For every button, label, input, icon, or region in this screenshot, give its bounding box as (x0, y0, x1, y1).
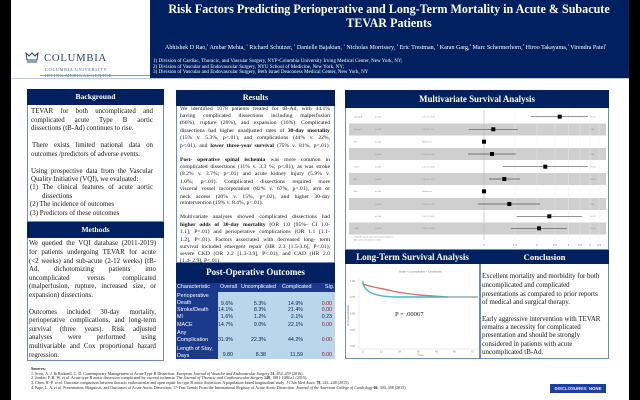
heading: conclusion: Conclusion (523, 252, 566, 262)
text: methods paragraphs: for patients undergoing TEVAR for acute (29, 249, 156, 256)
row: perioperative death (177, 293, 332, 307)
text: methods paragraphs: Outcomes included 30-day mortality, (29, 309, 156, 316)
chart: forest plot: Overall hazard ratio and model statistics (354, 236, 394, 238)
text: conclusion paragraphs: considered in patients with acute (482, 341, 572, 348)
row: MACE: MACE (177, 322, 193, 328)
references (31, 366, 407, 390)
text: background paragraphs: outcomes /predictors of adverse events. (31, 151, 140, 158)
heading: background (27, 89, 164, 105)
chart: forest plot: 1.2 (0.8–1.6) (422, 154, 435, 156)
chart: forest plot: Ref (354, 191, 358, 193)
row: MACE: 22.1% (288, 322, 303, 328)
text: results paragraphs: reintervention (19% v. 8.4%, p<.01). (180, 200, 263, 206)
chart: forest plot: n=100 (375, 216, 382, 218)
title: Risk Factors Predicting Perioperative and Long-Term Mortality in Acute & Subacute (168, 2, 610, 16)
panel: post-operative outcomes table (176, 263, 335, 359)
chart: forest plot: 1.4 (1.1–1.7) (422, 179, 435, 181)
chart: forest plot: CAD (354, 227, 359, 230)
text: conclusion paragraphs: presentation and should be strongly (482, 332, 580, 339)
text: methods paragraphs: (<2 weeks) and sub-acute (2-12 weeks) (tB- (29, 258, 156, 265)
row: MI: 0.23 (322, 314, 332, 320)
text: results paragraphs: [1.4- 2.9], P<.01). (180, 258, 221, 264)
row: MACE: 9.0% (254, 322, 266, 328)
text: conclusion paragraphs: Excellent mortality and morbidity for both (482, 273, 599, 280)
row: stroke/death: 14.1% (218, 307, 233, 313)
chart: forest plot: Reference (422, 190, 433, 193)
panel: methods (27, 222, 164, 361)
chart: Kaplan-Meier survival curves: 0.25 (350, 329, 355, 332)
text: results paragraphs: visceral vessel incorporation (82% v. 67%, p<.01), arm or (180, 186, 330, 192)
text: background paragraphs: There exists limited national data on (32, 142, 153, 149)
chart: forest plot: 1.5 (513, 243, 517, 247)
table header row: Sig. (325, 284, 334, 290)
row: perioperative death: 5.3% (254, 301, 266, 307)
text: background paragraphs: TEVAR for both uncomplicated and (31, 108, 153, 115)
row: length of stay: 9.80 (223, 352, 233, 358)
row: stroke/death: 0.00 (322, 307, 332, 313)
text: results paragraphs: survival included emergent repair (HR 2.3 [1.5-3.6], P<.01), (180, 244, 330, 250)
heading: multivariate survival analysis: Multivariate Survival Analysis (419, 94, 535, 104)
chart: Kaplan-Meier survival curves: 12 (380, 350, 383, 354)
chart: forest plot: <0.01 (590, 116, 596, 118)
row: perioperative death: Perioperative (177, 293, 209, 299)
chart: forest plot: 0.08 (590, 204, 595, 206)
chart: forest plot: 2.3 (1.5–3.6) (422, 216, 435, 218)
disclosures badge: DISCLOSURES: NONE (554, 386, 602, 391)
text: methods paragraphs: perioperative complications, and long-term (29, 317, 156, 324)
heading: background: Background (76, 92, 115, 101)
panel: results (176, 90, 335, 263)
chart: Kaplan-Meier survival curves: 0.00 (350, 345, 355, 348)
text: methods paragraphs: (malperfusion, rupture, increased size, or (29, 283, 156, 290)
chart: forest plot: n=100 (375, 191, 382, 193)
chart: forest plot: Group A (354, 116, 363, 118)
chart: Kaplan-Meier survival curves: 0.75 (350, 296, 355, 299)
text: background paragraphs: Using prospective data from the Vascular (31, 168, 153, 175)
text: background paragraphs (30, 108, 153, 217)
text: conclusion paragraphs: uncomplicated tB-Ad. (482, 349, 543, 356)
heading: post-operative outcomes: Post-Operative Outcomes (206, 267, 305, 277)
panel: conclusion (480, 250, 609, 359)
references: 2. Jonker, F. H. W. et al. Acute type B aortic dissection complicated by visceral ischemia. The Journal of Thoracic and Cardiovascular Surgery 149, 1081-1086.e1 (2015). (31, 375, 307, 380)
table first column background (176, 283, 218, 359)
row: length of stay: 0.00 (322, 352, 332, 358)
chart: forest plot: 2 (536, 243, 538, 247)
chart: forest plot: 2.7 (1.6–3.7) (422, 116, 435, 118)
chart: forest plot: n=100 (375, 116, 382, 118)
chart: forest plot: 2.0 (1.4–2.9) (422, 228, 435, 230)
chart: forest plot: n=100 (375, 204, 382, 206)
text: results paragraphs: complicated dissections (11% v. 3.3 %; p<.01), as was stroke (180, 164, 330, 170)
logo subtitle: COLUMBIA UNIVERSITY (45, 67, 107, 72)
chart: forest plot: 1 (483, 243, 485, 247)
chart: forest plot (349, 110, 606, 247)
chart: forest plot: n=100 (375, 154, 382, 156)
chart: Kaplan-Meier survival curves: Survival probability (347, 304, 350, 326)
text: conclusion paragraphs (482, 272, 600, 356)
text: conclusion paragraphs: uncomplicated and complicated (482, 282, 570, 289)
chart: forest plot: CKD (354, 166, 359, 168)
chart: forest plot: <0.01 (590, 227, 596, 230)
row: any complication: 22.3% (251, 337, 266, 343)
chart: Kaplan-Meier survival curves: 48 (435, 350, 438, 354)
chart: forest plot: n=100 (375, 142, 382, 144)
chart: forest plot: n=100 (375, 179, 382, 181)
text: methods paragraphs: uncomplicated versus complicated (29, 275, 156, 282)
chart: Kaplan-Meier survival curves: P = .00067 (395, 311, 424, 318)
heading: methods (27, 222, 164, 238)
chart: forest plot: 0.09 (590, 154, 595, 156)
text: methods paragraphs: survival (three years). Risk adjusted (29, 326, 156, 333)
chart: Kaplan-Meier survival curves: Strata + Uncomplicated + Complicated (399, 270, 442, 274)
chart: forest plot: n=100 (375, 129, 382, 131)
references: Sources: (31, 366, 46, 371)
logo wordmark: COLUMBIA (44, 52, 107, 64)
row: MACE (177, 322, 332, 328)
text: results paragraphs: Post- operative spinal ischemia was more common in (180, 157, 330, 163)
row: any complication: Any (177, 330, 186, 336)
text: results paragraphs: (66%), rupture (20%), and expansion (16%). Complicated (180, 120, 330, 126)
table header row: Complicated (282, 284, 311, 290)
text: results paragraphs: 1.1], P=.01) and perioperative complications (OR 1.1 [1.1- (180, 229, 330, 235)
text: results paragraphs: (8.2% v. 3.7%; p<.01) and acute kidney injury (5.9% v. (180, 171, 330, 177)
chart: forest plot: 1.5 (0.9–2.1) (422, 204, 435, 206)
text: results paragraphs: p<.01), and lower three-year survival (75% v. 81%, p<.01). (180, 143, 330, 149)
row: length of stay: Days (177, 352, 189, 358)
references: 4. Pape, L. A. et al. Presentation, Diagnosis, and Outcomes of Acute Aortic Dissection: 17-Year Trends From the International Registry of Acute Aortic Dissection. Journal of the American College of Cardiology 66, 350–358 (2015). (31, 385, 407, 390)
heading: long-term survival analysis (345, 250, 480, 264)
row: length of stay: 8.38 (256, 352, 266, 358)
chart: Kaplan-Meier survival curves: 72 (471, 350, 474, 354)
row: stroke/death: 8.3% (254, 307, 266, 313)
text: conclusion paragraphs: of medical and surgical therapy. (482, 299, 570, 306)
heading: results: Results (243, 93, 268, 102)
row: MI: 2.1% (291, 314, 303, 320)
text: background paragraphs: dissections (42, 193, 72, 200)
text: background paragraphs: (2) The incidence of outcomes (30, 201, 114, 208)
row: stroke/death: 21.4% (288, 307, 303, 313)
chart: forest plot: 2.2 (1.3–3.9) (422, 166, 435, 168)
text: conclusion paragraphs: Early aggressive intervention with TEVAR (482, 316, 600, 323)
chart: forest plot: n=100 (375, 228, 382, 230)
row: perioperative death: 14.9% (288, 301, 303, 307)
heading: post-operative outcomes (176, 263, 335, 283)
text: methods paragraphs: analyses were performed using (29, 334, 156, 341)
row: any complication: 0.00 (322, 337, 332, 343)
chart: forest plot: 2.5 (553, 243, 557, 247)
row: length of stay: Length of Stay, (177, 346, 213, 352)
row: length of stay: 11.59 (290, 352, 303, 358)
logo subtitle line 2: IRVING MEDICAL CENTER (45, 72, 112, 78)
chart: forest plot: Reference (422, 140, 433, 144)
panel: long-term survival analysis (345, 250, 480, 359)
row: MI: MI (177, 314, 183, 320)
chart: Kaplan-Meier survival curves: 24 (398, 350, 401, 354)
row: any complication: 44.2% (288, 337, 303, 343)
row: MACE: 0.00 (322, 322, 332, 328)
chart: Kaplan-Meier survival curves: 36 (416, 350, 420, 354)
affiliations: 1) Division of Cardiac, Thoracic, and Vascular Surgery, NYP-Columbia University Irving Medical Center, New York, NY; (153, 58, 403, 64)
heading: methods: Methods (81, 225, 110, 234)
chart: forest plot: <0.01 (590, 215, 596, 218)
text: results paragraphs: neck access (20% v. 15%, p=.02), and higher 30-day (180, 194, 330, 200)
chart: forest plot: 4.5 (597, 243, 601, 247)
text: methods paragraphs: expansion) dissections. (29, 292, 93, 299)
text: results paragraphs: We identified 1078 patients treated for tB-Ad, with 44.1% (180, 106, 330, 112)
row: MI (177, 314, 332, 320)
row: length of stay (177, 346, 332, 358)
affiliations: 2) Division of Vascular and Endovascular Surgery, NYU School of Medicine, New York, NY; (153, 64, 344, 70)
affiliations (153, 58, 403, 75)
disclosures badge (550, 384, 606, 393)
chart: forest plot: 3 (568, 243, 570, 247)
chart: Kaplan-Meier survival curves (347, 270, 479, 357)
text: background paragraphs: Quality Initiative (VQI), we evaluated: (31, 176, 138, 183)
text: conclusion paragraphs: remains a necessity for complicated (482, 324, 581, 331)
chart: forest plot: AIC and concordance index (354, 238, 382, 242)
text: background paragraphs: dissections (tB-Ad) continues to rise. (31, 125, 133, 132)
chart: forest plot: Group B (354, 128, 363, 131)
table header row: Characteristic (177, 284, 210, 290)
authors: Abhishek D Rao,1 Ambar Mehta, 1 Richard Schutzer, 1 Danielle Bajakian, 1 Nicholas Morrissey, 1 Eric Trestman, 1 Karan Garg,2 Marc Schermerhorn,3 Hiroo Takayama,1 Virendra Patel1 (165, 43, 607, 51)
chart: Kaplan-Meier survival curves: 0.50 (350, 313, 355, 316)
row: MACE: 14.7% (218, 322, 233, 328)
text: background paragraphs: (1) The clinical features of acute aortic (30, 184, 153, 191)
heading: results (176, 90, 335, 106)
panel: background (27, 89, 164, 222)
affiliations: 3) Division of Vascular and Endovascular Surgery, Beth Israel Deaconess Medical Center, New York, NY (153, 69, 368, 75)
text: results paragraphs: severe CKD (OR 2.2 [1.3-3.9], P<.01), and CAD (HR 2.0 (180, 251, 330, 257)
text: methods paragraphs: We queried the VQI database (2011-2019) (29, 240, 156, 247)
row: perioperative death: 9.6% (221, 301, 233, 307)
table header row (176, 283, 335, 292)
row: any complication: Complication (177, 337, 208, 343)
table header row: Overall (220, 284, 237, 290)
row: perioperative death: Death (177, 300, 191, 306)
text: background paragraphs: complicated acute Type B aortic (31, 117, 153, 124)
text: results paragraphs: Multivariate analyses showed complicated dissections had (180, 214, 330, 220)
heading: conclusion (480, 250, 609, 264)
text: results paragraphs: dissections had higher unadjusted rates of 30-day mortality (180, 128, 330, 134)
header banner (150, 0, 630, 78)
chart: forest plot: 4 (589, 243, 591, 247)
text: results paragraphs: 1.0%; p<.01). Complicated dissections required more (180, 179, 330, 185)
references: 1. Scott, A. J. & Bicknell, C. D. Contemporary Management of Acute Type B Dissection. European Journal of Vascular and Endovascular Surgery 51, 452–459 (2016). (31, 371, 304, 376)
chart: forest plot: MI (354, 179, 357, 181)
text: methods paragraphs: regression. (29, 352, 59, 359)
chart: forest plot: 1.3 (0.8–1.6) (422, 129, 435, 131)
text: results paragraphs: 1.2], P<.01). Factors associated with decreased long- term (180, 237, 330, 243)
title: TEVAR Patients (346, 16, 432, 30)
chart: forest plot: 3.5 (578, 243, 582, 247)
text: conclusion paragraphs: presentations as compared to prior reports (482, 291, 598, 298)
row: MI: 1.6% (221, 314, 233, 320)
heading: multivariate survival analysis (345, 90, 609, 108)
heading: long-term survival analysis: Long-Term Survival Analysis (356, 252, 469, 262)
chart: forest plot: <0.01 (590, 166, 596, 168)
panel: multivariate survival analysis (345, 90, 609, 250)
row: any complication: 31.9% (218, 337, 233, 343)
text: methods paragraphs: multivariable and Cox proportional hazard (29, 343, 156, 350)
row: any complication (177, 330, 332, 343)
chart: Kaplan-Meier survival curves: Time (418, 354, 424, 357)
chart: Kaplan-Meier survival curves: 60 (453, 350, 456, 354)
text: methods paragraphs: Ad, dichotomizing patients into (29, 266, 156, 273)
chart: forest plot: 0.06 (590, 129, 595, 131)
row: MI: 1.2% (254, 314, 266, 320)
row: perioperative death: 0.00 (322, 301, 332, 307)
row: stroke/death: Stroke/Death (177, 307, 208, 313)
chart: forest plot: Ref (354, 142, 358, 144)
chart: forest plot: <0.01 (590, 178, 596, 181)
text: results paragraphs (180, 106, 330, 264)
title (168, 2, 610, 30)
table header row: Uncomplicated (241, 284, 276, 290)
references: 3. Chen, H.-P. et al. Outcome comparison between thoracic endovascular and open repair for type B aortic dissection: A population-based longitudinal study. J Chin Med Assoc 78, 241–248 (2015). (31, 380, 349, 385)
chart: forest plot: n=100 (375, 166, 382, 168)
text: results paragraphs: higher odds of 30-day mortality (OR 1.0 [95%- CI 1.0- (180, 222, 330, 228)
text: results paragraphs: (15% v. 5.3%, p<.01), and complications (44% v. 22%, (180, 135, 330, 141)
chart: Kaplan-Meier survival curves: 1.00 (350, 280, 355, 283)
text: results paragraphs: having complicated dissections including malperfusion (180, 113, 330, 119)
text: methods paragraphs (29, 240, 156, 359)
logo: Columbia University Irving Medical Center (25, 52, 112, 78)
text: background paragraphs: (3) Predictors of these outcomes (30, 210, 119, 217)
row: stroke/death (177, 307, 332, 313)
icon: crown (25, 52, 39, 62)
chart: Kaplan-Meier survival curves: 0 (362, 350, 364, 354)
